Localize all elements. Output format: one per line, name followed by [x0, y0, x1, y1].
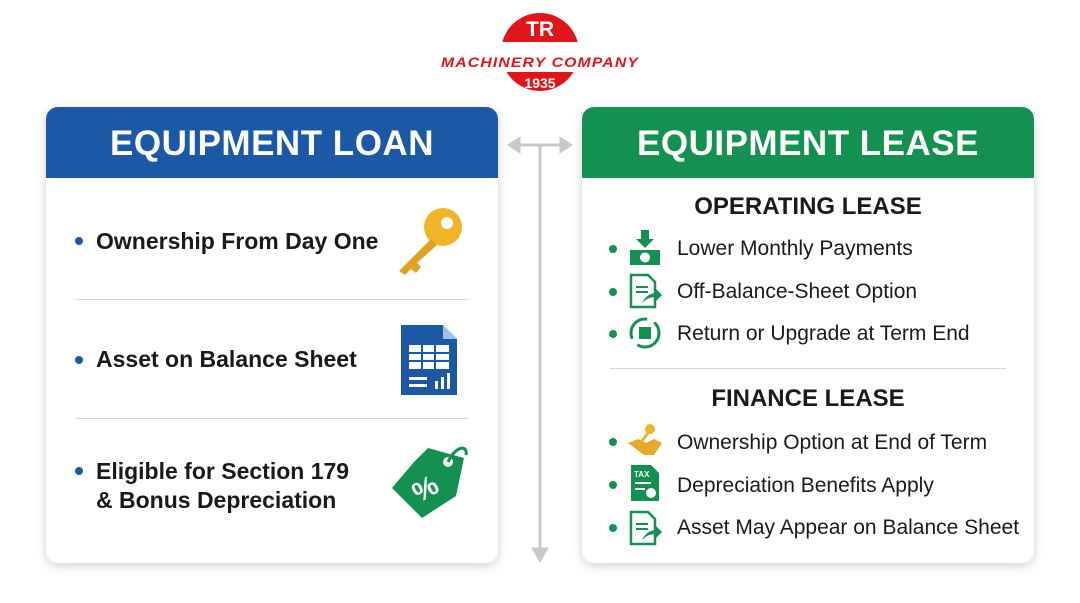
item: section 179: & Bonus Depreciation — [96, 487, 336, 513]
heading: lease — [582, 107, 1034, 178]
item: section 179 — [96, 458, 349, 513]
list: operating: Return or Upgrade at Term End — [677, 322, 970, 345]
icon: tag — [392, 446, 468, 518]
list: finance — [609, 424, 1019, 546]
list: finance: Depreciation Benefits Apply — [677, 474, 934, 497]
arrows — [507, 136, 573, 563]
list: finance: Ownership Option at End of Term — [677, 431, 987, 454]
logo: TR — [526, 18, 554, 41]
icon: key — [399, 208, 462, 275]
icon: tax — [631, 465, 659, 501]
item: balance sheet: Asset on Balance Sheet — [96, 346, 357, 372]
panel: equipment lease — [582, 107, 1034, 563]
icon: handshake — [628, 424, 662, 455]
icon: spreadsheet — [401, 325, 457, 395]
heading: loan — [46, 107, 498, 178]
panel: equipment loan — [46, 107, 498, 563]
icon: document — [630, 274, 662, 308]
logo: 1935 — [524, 75, 556, 91]
icon: return — [630, 318, 660, 348]
logo — [441, 13, 640, 91]
subheading: operating lease: OPERATING LEASE — [694, 193, 922, 220]
list: operating: Off-Balance-Sheet Option — [677, 280, 917, 303]
list: operating — [609, 230, 970, 348]
subheading: finance lease: FINANCE LEASE — [711, 385, 905, 412]
icon: money — [630, 230, 660, 265]
logo: MACHINERY COMPANY — [441, 54, 640, 70]
item: ownership: Ownership From Day One — [96, 228, 378, 254]
heading: lease: EQUIPMENT LEASE — [637, 124, 979, 163]
list: finance: Asset May Appear on Balance Sheet — [677, 516, 1019, 539]
icon: document 2 — [630, 510, 662, 546]
icon: tag: % — [407, 469, 444, 508]
heading: loan: EQUIPMENT LOAN — [110, 124, 434, 163]
list: operating: Lower Monthly Payments — [677, 237, 913, 260]
icon: tax: TAX — [634, 470, 650, 479]
item: section 179: Eligible for Section 179 — [96, 458, 349, 484]
